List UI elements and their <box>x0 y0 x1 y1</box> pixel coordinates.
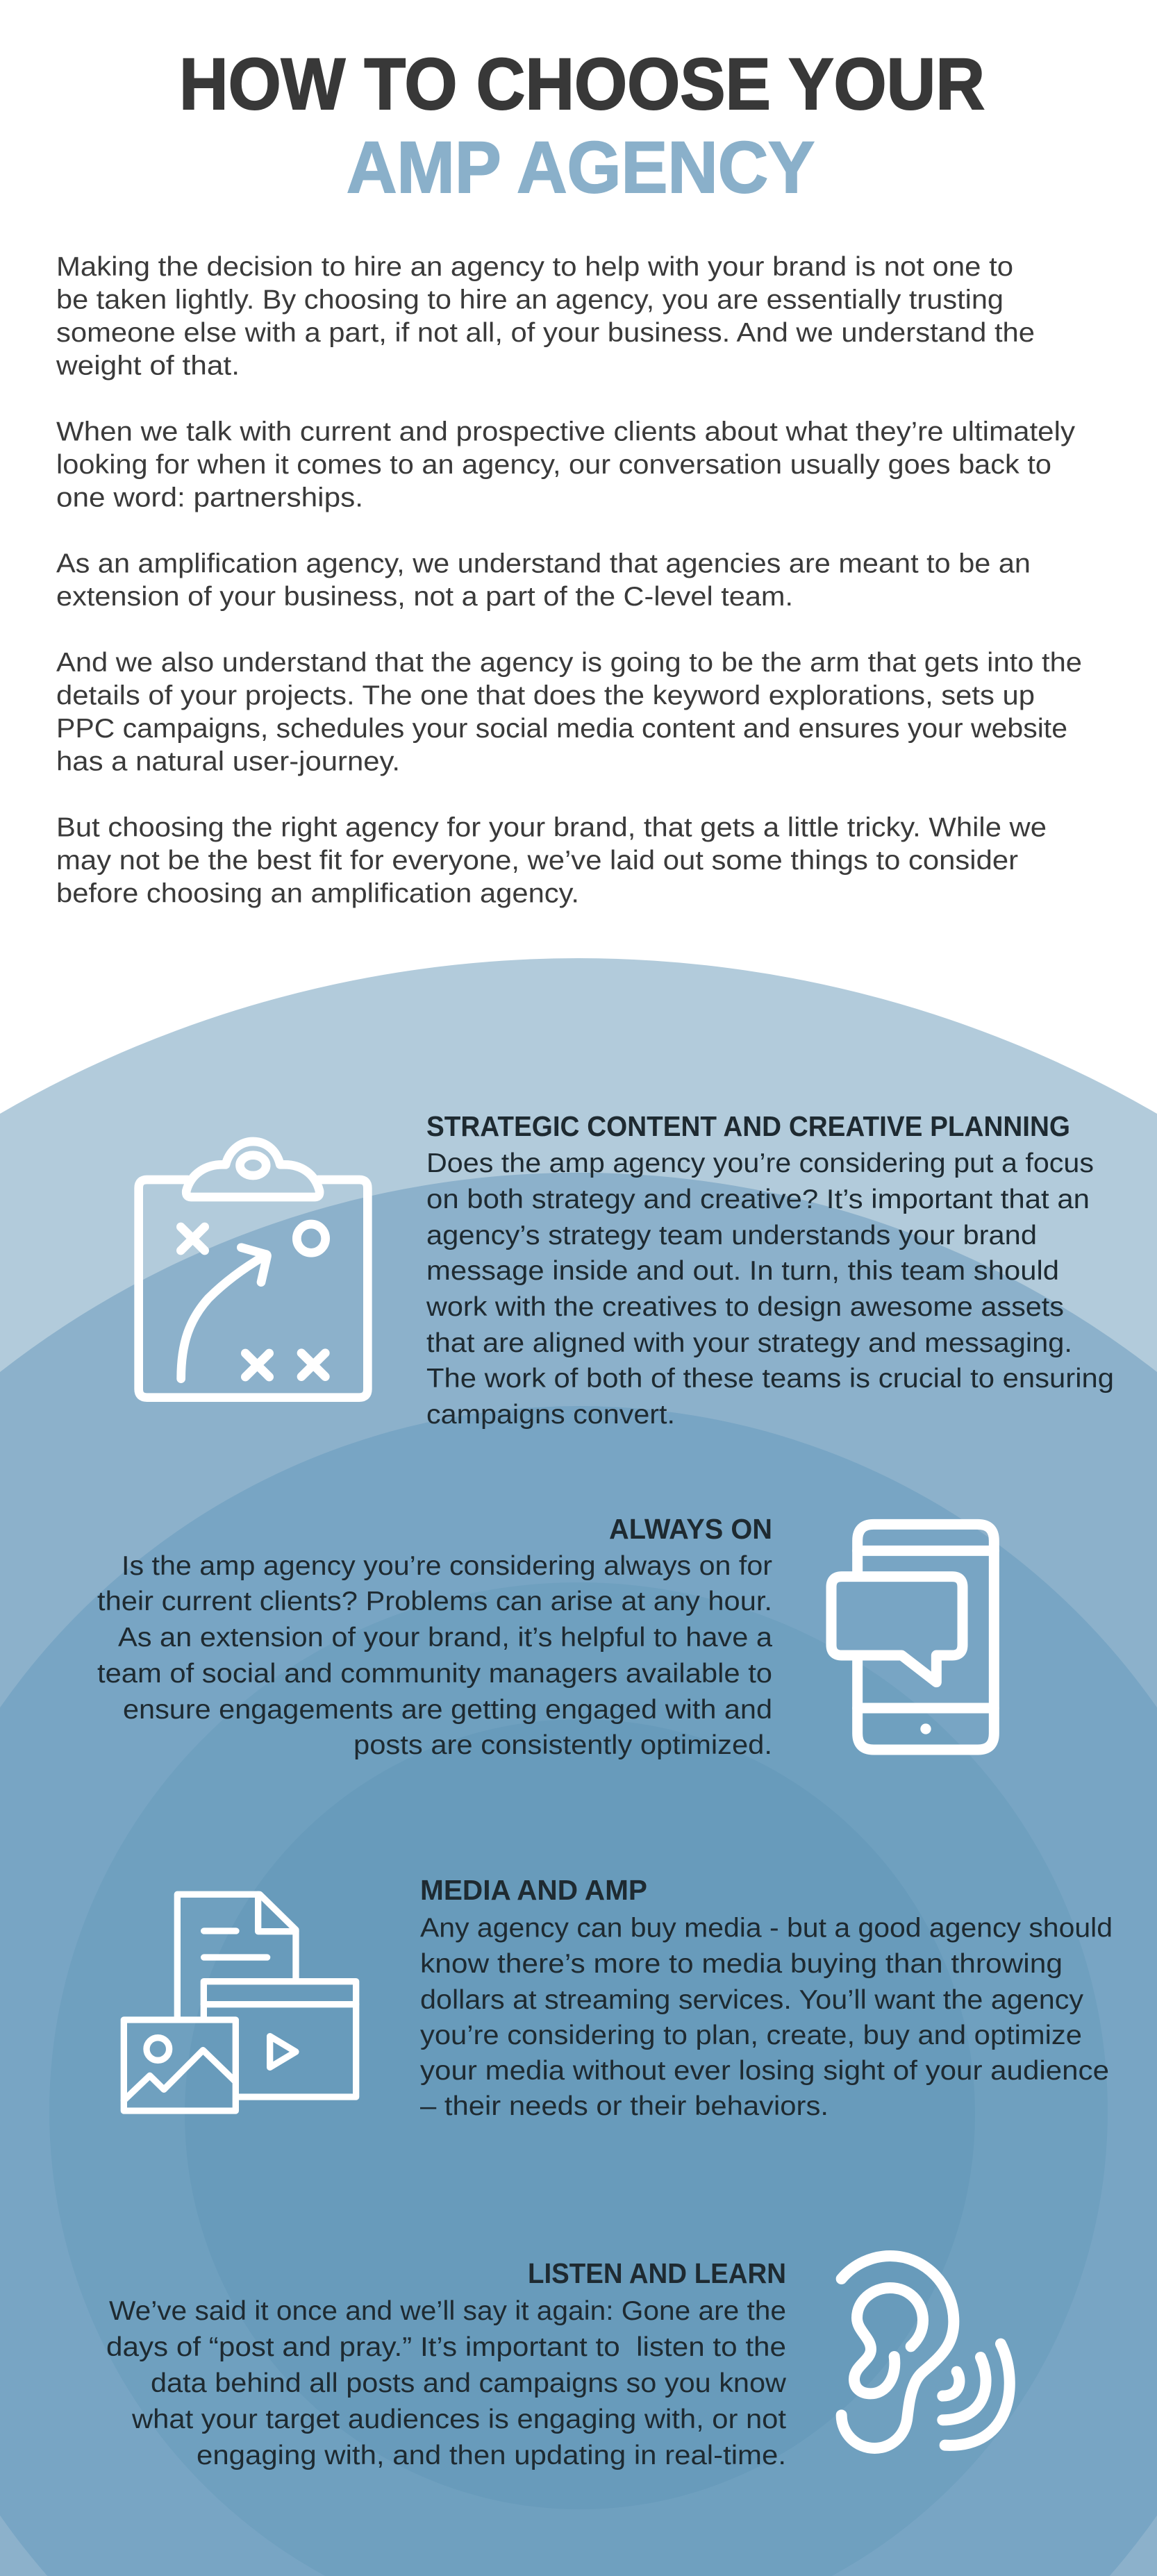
intro paragraph 1: be taken lightly. By choosing to hire an agency, you are essentially trusting <box>56 285 1004 315</box>
intro paragraph 2: looking for when it comes to an agency, our conversation usually goes back to <box>56 450 1051 480</box>
intro paragraph 4 <box>56 648 1082 776</box>
title: AMP AGENCY <box>347 127 815 208</box>
intro paragraph 1: weight of that. <box>56 351 240 380</box>
section: always on: Is the amp agency you’re considering always on for <box>122 1551 772 1581</box>
section: strategic content and creative planning: on both strategy and creative? It’s important that an <box>426 1185 1090 1214</box>
icon: ear with sound waves <box>842 2256 1010 2448</box>
section: listen and learn: We’ve said it once and we’ll say it again: Gone are the <box>109 2296 786 2326</box>
section: media and amp: MEDIA AND AMP <box>420 1874 647 1906</box>
icon: clipboard with play diagram <box>139 1141 367 1398</box>
section: always on: ALWAYS ON <box>609 1513 772 1545</box>
section: strategic content and creative planning: campaigns convert. <box>426 1400 675 1430</box>
section: always on: their current clients? Problems can arise at any hour. <box>97 1587 772 1616</box>
section: listen and learn: days of “post and pray.” It’s important to listen to the <box>106 2332 786 2362</box>
intro paragraph 5 <box>56 812 1047 908</box>
section: media and amp: Any agency can buy media - but a good agency should <box>420 1914 1113 1943</box>
section: media and amp: your media without ever losing sight of your audience <box>420 2056 1109 2086</box>
intro paragraph 4: has a natural user-journey. <box>56 747 400 776</box>
section: strategic content and creative planning <box>426 1110 1114 1430</box>
section: strategic content and creative planning: STRATEGIC CONTENT AND CREATIVE PLANNING <box>426 1110 1070 1142</box>
intro paragraph 1: Making the decision to hire an agency to help with your brand is not one to <box>56 252 1013 282</box>
section: always on: posts are consistently optimized. <box>353 1730 772 1760</box>
section: listen and learn <box>106 2257 787 2470</box>
section: always on: team of social and community managers available to <box>97 1659 772 1689</box>
intro paragraph 2: When we talk with current and prospective clients about what they’re ultimately <box>56 417 1076 447</box>
section: always on <box>97 1513 772 1760</box>
section: listen and learn: engaging with, and then updating in real-time. <box>197 2441 786 2470</box>
section: listen and learn: what your target audiences is engaging with, or not <box>131 2404 786 2434</box>
intro paragraph 3: As an amplification agency, we understand that agencies are meant to be an <box>56 549 1031 579</box>
title: HOW TO CHOOSE YOUR <box>179 44 985 125</box>
intro paragraph 1: someone else with a part, if not all, of your business. And we understand the <box>56 318 1035 348</box>
intro paragraph 4: details of your projects. The one that does the keyword explorations, sets up <box>56 680 1035 711</box>
section: strategic content and creative planning: Does the amp agency you’re considering put a focus <box>426 1148 1094 1178</box>
title <box>179 44 985 208</box>
intro paragraph 3 <box>56 549 1031 612</box>
intro paragraph 1 <box>56 252 1035 380</box>
intro paragraph 5: But choosing the right agency for your brand, that gets a little tricky. While we <box>56 812 1047 843</box>
icon: smartphone with speech bubble <box>831 1524 994 1750</box>
section: media and amp: – their needs or their behaviors. <box>420 2091 829 2121</box>
intro paragraph 4: PPC campaigns, schedules your social media content and ensures your website <box>56 714 1067 744</box>
section: strategic content and creative planning: The work of both of these teams is crucial to ensuring <box>426 1364 1114 1394</box>
intro paragraph 4: And we also understand that the agency is going to be the arm that gets into the <box>56 648 1082 678</box>
section: listen and learn: data behind all posts and campaigns so you know <box>151 2368 787 2398</box>
section: media and amp: know there’s more to media buying than throwing <box>420 1949 1063 1979</box>
intro paragraph 5: before choosing an amplification agency. <box>56 879 579 908</box>
icon: document, video and image <box>124 1894 356 2111</box>
section: media and amp: you’re considering to plan, create, buy and optimize <box>420 2021 1082 2050</box>
intro paragraph 2: one word: partnerships. <box>56 483 363 512</box>
section: always on: As an extension of your brand, it’s helpful to have a <box>118 1623 772 1653</box>
intro paragraph 2 <box>56 417 1076 512</box>
section: media and amp <box>420 1874 1113 2121</box>
intro paragraph 5: may not be the best fit for everyone, we’ve laid out some things to consider <box>56 846 1018 876</box>
section: always on: ensure engagements are getting engaged with and <box>123 1695 772 1725</box>
section: media and amp: dollars at streaming services. You’ll want the agency <box>420 1985 1084 2015</box>
section: strategic content and creative planning: work with the creatives to design awesome assets <box>426 1292 1064 1322</box>
section: strategic content and creative planning: message inside and out. In turn, this team should <box>426 1256 1059 1286</box>
section: strategic content and creative planning: agency’s strategy team understands your brand <box>426 1221 1037 1251</box>
section: strategic content and creative planning: that are aligned with your strategy and messaging. <box>426 1328 1072 1358</box>
intro paragraph 3: extension of your business, not a part of the C-level team. <box>56 582 793 612</box>
section: listen and learn: LISTEN AND LEARN <box>528 2257 786 2289</box>
